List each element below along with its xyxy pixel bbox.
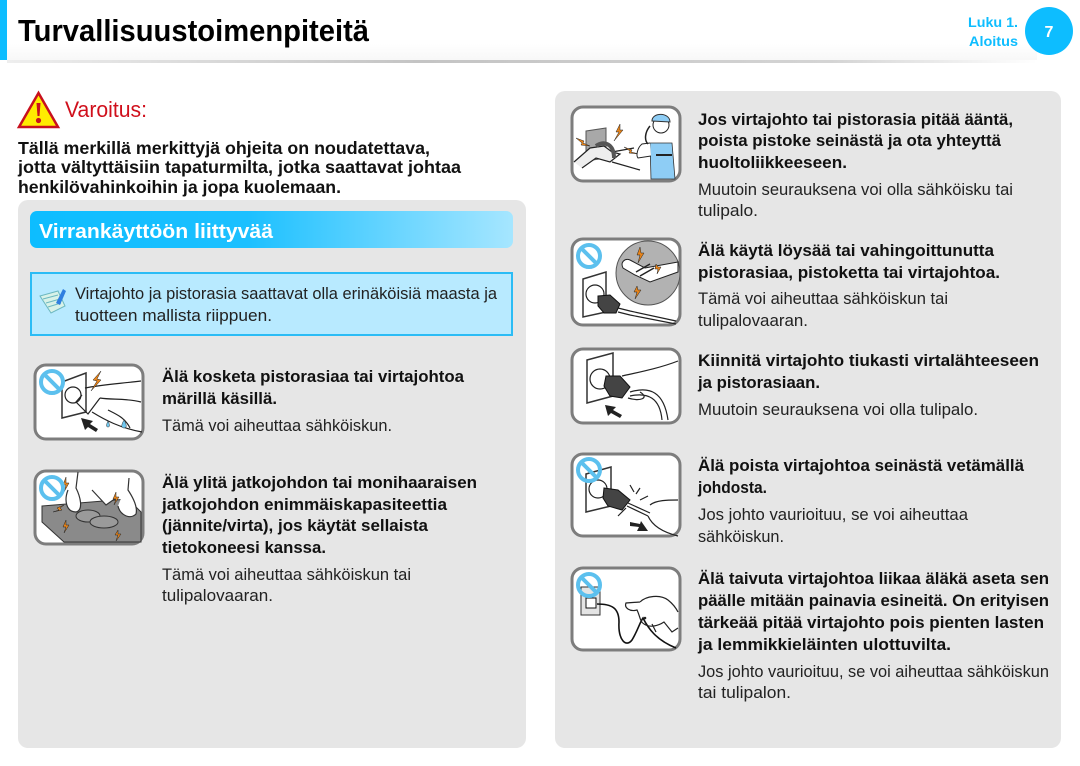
icon: dog chewing cord [572,568,680,650]
text: damaged plug: Tämä voi aiheuttaa sähköiskun tai [698,290,948,308]
icon: warning triangle [19,93,58,127]
text: damaged plug: pistorasiaa, pistoketta tai virtajohtoa. [698,264,1000,282]
text: plug in firmly: Kiinnitä virtajohto tiukasti virtalähteeseen [698,352,1039,370]
warning intro text: henkilövahinkoihin ja jopa kuolemaan. [18,177,341,197]
text: wet hands [162,368,465,435]
text: wet hands: Älä kosketa pistorasiaa tai virtajohtoa [162,368,465,386]
text: damaged plug: tulipalovaaran. [698,312,808,330]
text: dog chewing cord: ja lemmikkieläinten ulottuvilta. [697,636,951,654]
warning intro text: jotta vältyttäisiin tapaturmilta, jotka saattavat johtaa [17,157,461,177]
section heading bar [30,211,513,248]
text: noisy outlet: Muutoin seurauksena voi olla sähköisku tai [698,181,1013,199]
text: noisy outlet: huoltoliikkeeseen. [698,154,847,172]
text: noisy outlet: tulipalo. [698,202,758,220]
panel: right column [555,91,1061,748]
text: power strip: Älä ylitä jatkojohdon tai monihaaraisen [162,474,477,492]
text: power strip: (jännite/virta), jos käytät sellaista [162,517,429,535]
text: plug in firmly: ja pistorasiaan. [697,374,820,392]
text: dog chewing cord [697,570,1049,702]
section heading bar: Virrankäyttöön liittyvää [39,221,274,243]
text: dog chewing cord: tärkeää pitää virtajohto pois pienten lasten [698,614,1044,632]
text: wet hands: Tämä voi aiheuttaa sähköiskun. [162,417,392,435]
text: do not pull the cord: Jos johto vaurioituu, se voi aiheuttaa [698,506,969,524]
text: noisy outlet [698,111,1013,220]
text: plug in firmly [697,352,1039,419]
note box [31,273,512,335]
header band [0,0,1037,63]
text: dog chewing cord: Jos johto vaurioituu, se voi aiheuttaa sähköiskun [698,663,1049,681]
text: dog chewing cord: tai tulipalon. [698,684,791,702]
icon: overloaded power strip [35,471,143,544]
icon: noisy outlet and technician [572,107,680,181]
warning intro text [17,138,461,197]
text: damaged plug: Älä käytä löysää tai vahingoittunutta [698,242,995,260]
page number badge: 7 [1045,24,1054,41]
text: do not pull the cord [697,457,1025,546]
text: wet hands: märillä käsillä. [162,390,277,408]
text: noisy outlet: Jos virtajohto tai pistorasia pitää ääntä, [698,111,1013,129]
icon: plug in firmly [572,349,680,423]
text: do not pull the cord: sähköiskun. [698,528,784,546]
chapter label: Luku 1. [968,14,1018,30]
text: dog chewing cord: päälle mitään painavia esineitä. On erityisen [698,592,1049,610]
warning intro text: Tällä merkillä merkittyjä ohjeita on noudatettava, [18,138,430,158]
text: power strip: tietokoneesi kanssa. [162,539,326,557]
text: dog chewing cord: Älä taivuta virtajohtoa liikaa äläkä aseta sen [698,570,1049,588]
icon: do not pull the cord [572,454,680,536]
text: plug in firmly: Muutoin seurauksena voi olla tulipalo. [698,401,978,419]
text: power strip: Tämä voi aiheuttaa sähköiskun tai [162,566,411,584]
text: noisy outlet: poista pistoke seinästä ja ota yhteyttä [698,132,1002,150]
icon: wet hands [35,365,143,439]
chapter label: Aloitus [969,33,1018,49]
panel: left column [18,200,526,748]
page number badge [1025,7,1073,55]
chapter label [968,14,1018,49]
text: do not pull the cord: Älä poista virtajohtoa seinästä vetämällä [698,457,1025,475]
text: damaged plug [698,242,1000,330]
title: Turvallisuustoimenpiteitä [18,13,370,48]
note box: tuotteen mallista riippuen. [75,307,272,325]
icon: damaged plug and cord [572,239,680,325]
text: power strip: jatkojohdon enimmäiskapasiteettia [161,496,448,514]
text: power strip [161,474,477,605]
warning heading: Varoitus: [65,97,147,122]
note box: Virtajohto ja pistorasia saattavat olla erinäköisiä maasta ja [75,285,498,303]
text: do not pull the cord: johdosta. [697,479,767,497]
text: power strip: tulipalovaaran. [162,587,273,605]
